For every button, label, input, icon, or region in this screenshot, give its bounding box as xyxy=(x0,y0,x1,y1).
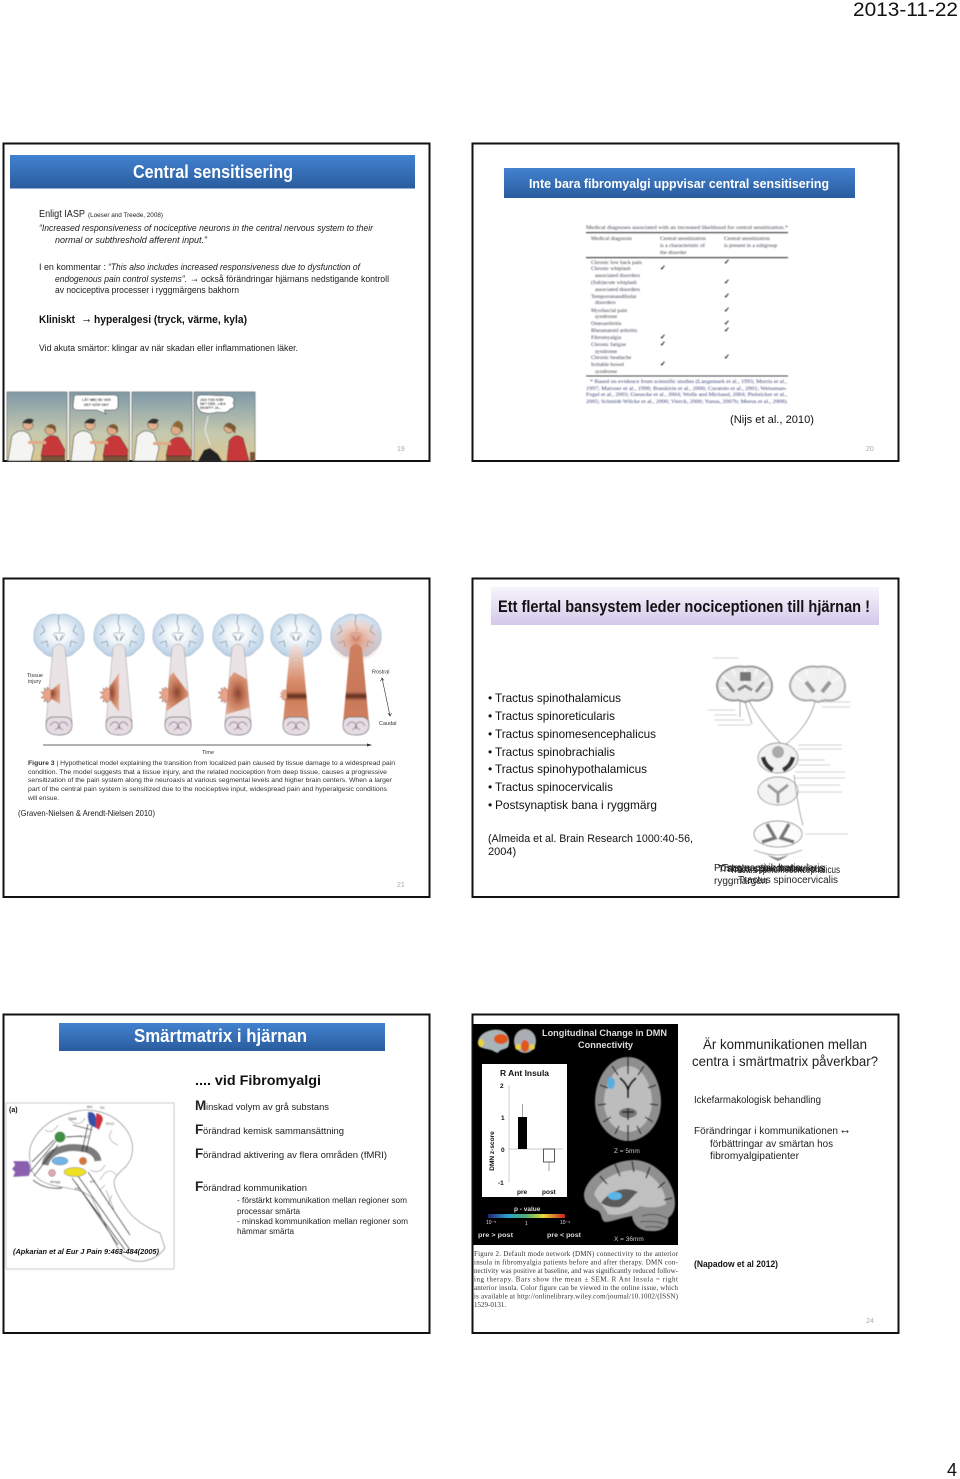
stage 5 xyxy=(271,614,321,735)
citation: Almeida xyxy=(488,833,693,858)
heading bar: Central sensitisering xyxy=(10,155,415,188)
table: medical diagnoses: ✓ xyxy=(660,333,666,341)
panel: slide 19 central sensitisering xyxy=(4,144,430,461)
subheading: vid Fibromyalgi: .... vid Fibromyalgi xyxy=(195,1072,321,1088)
findings list: F xyxy=(195,1179,203,1194)
text: communication changes xyxy=(694,1121,851,1162)
comic panel 2 figures xyxy=(71,395,128,461)
medulla section xyxy=(758,775,803,825)
figure: longitudinal DMN change xyxy=(473,1024,678,1245)
figure caption: insula in fibromyalgia patients before and after therapy. DMN con- xyxy=(474,1258,679,1266)
table: medical diagnoses: ✓ xyxy=(724,353,730,361)
label: tissue injury: Tissue xyxy=(27,673,43,679)
stage 3 xyxy=(153,614,203,735)
text block: commentary: av nociceptiva processer i ryggmärgens bakhorn xyxy=(55,285,239,295)
figure caption: nectivity was positive at baseline, and was significantly reduced follow- xyxy=(474,1267,679,1275)
colour scale: p-value: 10⁻⁵ xyxy=(486,1220,496,1226)
heading bar: Smärtmatrix: Smärtmatrix i hjärnan xyxy=(134,1026,307,1046)
midbrain section xyxy=(758,743,798,773)
comic strip xyxy=(7,392,255,461)
table: medical diagnoses: ✓ xyxy=(724,258,730,266)
text: communication changes: ↔ xyxy=(839,1121,851,1137)
text: communication changes: Förändringar i kommunikationen xyxy=(694,1126,838,1137)
labels: S1 xyxy=(100,1105,106,1110)
heading bar: pathways: Ett flertal bansystem leder nociceptionen till hjärnan ! xyxy=(498,598,870,616)
figure caption: part of the central pain system is sensitized due to the nociceptive input, widespread pain and hyperalgesic conditions xyxy=(28,786,388,793)
citation: Apkarian: (Apkarian et al Eur J Pain 9:463-484(2005) xyxy=(13,1247,159,1256)
table: medical diagnoses: Chronic headache xyxy=(591,355,632,361)
table: medical diagnoses: ✓ xyxy=(724,319,730,327)
findings list: örändrad aktivering av flera områden (fMRI) xyxy=(203,1150,387,1160)
figure caption: 1529-0131. xyxy=(474,1301,506,1309)
figure caption: Figure 3 | Hypothetical model explaining the transition from localized pain caused by tissue damage to a widespread pain xyxy=(28,760,395,767)
figure caption: condition. The model suggests that a tissue injury, and the related nociception from deep tissue, causes a progressive xyxy=(28,769,387,776)
figure caption xyxy=(27,760,395,802)
bar chart: R Ant Insula: pre xyxy=(517,1189,528,1196)
overlapping leftover labels: Tractus spinoreticularis xyxy=(722,863,824,874)
table: medical diagnoses: ✓ xyxy=(724,292,730,300)
heading bar: fibromyalgia: Inte bara fibromyalgi uppvisar central sensitisering xyxy=(529,176,829,191)
table: medical diagnoses: Chronic low back pain xyxy=(591,260,642,266)
table: medical diagnoses: is present in a subgroup xyxy=(724,243,777,249)
comic panel 1 figures xyxy=(8,419,65,461)
overlapping leftover labels xyxy=(714,863,840,887)
table: medical diagnoses: ✓ xyxy=(724,326,730,334)
findings list: örändrad kommunikation xyxy=(203,1183,307,1193)
text block: commentary xyxy=(39,262,389,295)
table: medical diagnoses: associated disorders xyxy=(595,273,640,279)
table: medical diagnoses: Irritable bowel xyxy=(591,362,625,368)
text block: IASP definition: “Increased responsiveness of nociceptive neurons in the central nervous system to their xyxy=(39,223,374,233)
text block: IASP definition: Enligt IASP xyxy=(39,209,85,220)
stage 2 xyxy=(94,614,144,735)
panel: slide 20 central sensitization table xyxy=(472,144,898,461)
findings list: F xyxy=(195,1122,203,1137)
bullet list: tracts: • xyxy=(488,798,492,812)
labels xyxy=(50,1104,115,1191)
bar chart: R Ant Insula: 1 xyxy=(501,1115,505,1122)
table: medical diagnoses: Temporomandibular xyxy=(591,294,637,300)
label: rostral caudal axis xyxy=(372,670,396,727)
table: medical diagnoses: 2005; Schmidt-Wilcke et al., 2006; Vierck, 2006; Yunus, 2007b; Meeus et al., 2008). xyxy=(586,398,789,405)
table: medical diagnoses: syndrome xyxy=(595,369,618,375)
bullet list: tracts: • xyxy=(488,780,492,794)
table: medical diagnoses: Central sensitization xyxy=(660,236,706,242)
comic panel 4 figures: DET DÄR.. LIKA xyxy=(200,402,226,406)
bullet list: tracts: Tractus spinocervicalis xyxy=(495,780,613,794)
table: medical diagnoses: Medical diagnosis xyxy=(591,236,632,242)
right brain section xyxy=(785,666,845,745)
table: medical diagnoses: ✓ xyxy=(660,360,666,368)
citation: Graven-Nielsen: (Graven-Nielsen & Arendt-Nielsen 2010) xyxy=(18,808,155,818)
colour scale: p-value: pre < post xyxy=(547,1232,582,1239)
labels: PCC xyxy=(106,1121,115,1126)
comic panel 4 figures: SKAFFT JA... xyxy=(200,406,222,410)
table: medical diagnoses: * Based on evidence from scientific studies (Langemark et al., 1993; Morris et al., xyxy=(590,378,788,385)
left brain section xyxy=(717,666,782,745)
table: medical diagnoses: Fogel et al., 2003; Giesecke et al., 2004; Wolfe and Michaud, 2004; Pielsticker et al., xyxy=(586,391,788,398)
comic panel 2 figures: LÅT MIG SE VAR xyxy=(82,397,111,402)
figure heading: Connectivity xyxy=(578,1040,633,1050)
citation: Almeida: (Almeida et al. Brain Research 1000:40-56, xyxy=(488,833,693,845)
text: communication changes: förbättringar av smärtan hos xyxy=(710,1139,833,1150)
table: medical diagnoses: the disorder xyxy=(660,250,687,256)
stage 1 xyxy=(34,614,84,735)
axial brain xyxy=(595,1057,661,1141)
stage 6 xyxy=(331,614,381,735)
sagittal brain xyxy=(584,1160,675,1231)
label: tissue injury: injury xyxy=(28,679,41,685)
text: communication changes: fibromyalgipatienter xyxy=(710,1151,800,1162)
figure caption: ing therapy. Bars show the mean ± SEM. R Ant Insula = right xyxy=(474,1276,678,1284)
text block: IASP definition: (Loeser and Treede, 2008) xyxy=(88,212,163,219)
bar chart: R Ant Insula xyxy=(482,1064,567,1197)
table: medical diagnoses: Chronic fatigue xyxy=(591,341,626,348)
heading bar: Smärtmatrix xyxy=(59,1023,385,1051)
table: medical diagnoses: (Sub)acute whiplash xyxy=(591,279,637,286)
table: medical diagnoses: syndrome xyxy=(595,349,618,355)
bullet list: tracts: Tractus spinoreticularis xyxy=(495,709,615,723)
colour scale: p-value xyxy=(478,1206,582,1239)
bar chart: R Ant Insula: post xyxy=(542,1189,557,1196)
bullet list: tracts: Tractus spinomesencephalicus xyxy=(495,727,656,741)
text block: commentary: endogenous pain control systems”. xyxy=(55,274,187,284)
figure caption: sensitization of the pain system along the neuroaxis at various segmental levels and higher brain centers. When a larger xyxy=(28,777,393,784)
panel: slide 22 pathways xyxy=(472,578,898,897)
findings list: örändrad kemisk sammansättning xyxy=(203,1126,344,1136)
icon: PF xyxy=(12,1161,30,1177)
bullet list: tracts xyxy=(488,691,657,812)
stage 4 xyxy=(213,614,263,735)
figure caption: anterior insula. Color figure can be viewed in the online issue, which xyxy=(474,1284,678,1292)
table: medical diagnoses: Chronic whiplash xyxy=(591,266,631,272)
colour scale: p-value: p - value xyxy=(514,1206,541,1213)
labels: SMA xyxy=(68,1116,77,1121)
colour scale: p-value: pre > post xyxy=(478,1232,514,1239)
findings list: F xyxy=(195,1146,203,1161)
table: medical diagnoses: Osteoarthritis xyxy=(591,321,621,327)
labels: M1 xyxy=(87,1104,93,1109)
labels: HT xyxy=(90,1179,96,1184)
text: treatment: Ickefarmakologisk behandling xyxy=(694,1095,821,1106)
comic panel 4 figures: JAG TOG KÄR xyxy=(200,398,224,402)
figure caption xyxy=(474,1250,679,1309)
icon: S2 xyxy=(79,1157,87,1165)
label: rostral caudal axis: Caudal xyxy=(379,721,396,727)
citation: Napadow: (Napadow et al 2012) xyxy=(694,1259,778,1269)
findings list: - minskad kommunikation mellan regioner som xyxy=(237,1217,408,1226)
icon: M1 S1 xyxy=(88,1112,103,1130)
bar chart: R Ant Insula: -1 xyxy=(498,1180,504,1187)
panel: slide 24 DMN connectivity xyxy=(472,1014,898,1333)
spinal section xyxy=(754,821,802,861)
pathways xyxy=(72,1172,130,1250)
text: clinical hyperalgesia: hyperalgesi (tryck, värme, kyla) xyxy=(94,314,247,326)
text block: commentary: “This also includes increased responsiveness due to dysfunction of xyxy=(108,262,361,272)
bullet list: tracts: Postsynaptisk bana i ryggmärg xyxy=(495,798,657,812)
colour scale: p-value: 1 xyxy=(525,1221,528,1227)
brain outline xyxy=(29,1110,165,1261)
labels: PCC xyxy=(81,1134,90,1139)
label: rostral caudal axis: Rostral xyxy=(372,670,389,676)
question heading xyxy=(692,1036,878,1069)
callout lines xyxy=(708,658,850,834)
colour scale: p-value: 10⁻⁵ xyxy=(560,1220,570,1226)
text block: commentary: också förändringar hjärnans nedstigande kontroll xyxy=(201,274,389,284)
figure caption: Figure 2. Default mode network (DMN) connectivity to the anterior xyxy=(474,1250,679,1258)
findings list: processar smärta xyxy=(237,1207,301,1216)
bullet list: tracts: Tractus spinothalamicus xyxy=(495,691,621,705)
icon: thalamus xyxy=(64,1168,86,1176)
arrow: time xyxy=(43,744,372,756)
icon: BG xyxy=(48,1170,56,1176)
panel: slide 21 progression model xyxy=(4,578,430,897)
heading bar: pathways xyxy=(491,587,879,625)
page date: 2013-11-22 xyxy=(853,0,958,21)
comic panel 3 figures xyxy=(134,419,191,461)
diagram: brain and spinal sections xyxy=(708,658,850,861)
page number 19: 19 xyxy=(397,446,405,453)
question heading: centra i smärtmatrix påverkbar? xyxy=(692,1053,878,1069)
text block: IASP definition: normal or subthreshold afferent input.” xyxy=(55,235,208,245)
bullet list: tracts: • xyxy=(488,745,492,759)
figure heading: Longitudinal Change in DMN xyxy=(542,1028,667,1038)
findings list: - förstärkt kommunikation mellan regioner som xyxy=(237,1196,407,1205)
bar chart: R Ant Insula: 2 xyxy=(500,1083,504,1090)
table: medical diagnoses: syndrome xyxy=(595,314,618,320)
heading bar: fibromyalgia xyxy=(504,168,855,198)
bar chart: R Ant Insula: DMN z-score xyxy=(489,1131,496,1171)
text: clinical hyperalgesia: Kliniskt xyxy=(39,314,75,326)
bullet list: tracts: • xyxy=(488,727,492,741)
findings list: inskad volym av grå substans xyxy=(206,1102,330,1112)
page number 24: 24 xyxy=(866,1318,874,1325)
table: medical diagnoses xyxy=(586,224,789,405)
bullet list: tracts: • xyxy=(488,709,492,723)
label: X = 36mm: X = 36mm xyxy=(614,1236,644,1243)
citation: Nijs: (Nijs et al., 2010) xyxy=(730,414,814,426)
findings list: hämmar smärta xyxy=(237,1227,295,1236)
bar chart: R Ant Insula: R Ant Insula xyxy=(500,1069,550,1078)
figure caption: will ensue. xyxy=(27,795,59,802)
citation: Almeida: 2004) xyxy=(488,846,516,858)
bar chart: R Ant Insula: 0 xyxy=(501,1147,505,1154)
findings list xyxy=(195,1098,408,1236)
table: medical diagnoses: ✓ xyxy=(660,340,666,348)
diagram: six stages of spreading sensitization xyxy=(34,614,381,735)
bullet list: tracts: • xyxy=(488,762,492,776)
question heading: Är kommunikationen mellan xyxy=(703,1036,867,1052)
text block: IASP definition xyxy=(39,209,374,245)
bullet list: tracts: Tractus spinohypothalamicus xyxy=(495,762,647,776)
overlapping leftover labels: Tractus spinothalamicus xyxy=(718,864,825,875)
table: medical diagnoses: Fibromyalgia xyxy=(591,335,622,341)
table: medical diagnoses: associated disorders xyxy=(595,287,640,293)
label: tissue injury xyxy=(27,673,43,685)
label: Z = 5mm: Z = 5mm xyxy=(614,1148,640,1155)
text: clinical hyperalgesia: → xyxy=(81,310,92,326)
table: medical diagnoses: is a characteristic of xyxy=(660,242,705,249)
heading bar: Central sensitisering: Central sensitisering xyxy=(133,162,293,182)
table: medical diagnoses: ✓ xyxy=(660,264,666,272)
comic panel 4 figures xyxy=(196,395,255,461)
table: medical diagnoses: Central sensitization xyxy=(724,236,770,242)
overlapping leftover labels: Postsynaptisk bana xyxy=(714,863,801,874)
diagram: pain matrix brain xyxy=(6,1103,174,1269)
text: clinical hyperalgesia xyxy=(39,310,247,326)
icon: ACC xyxy=(54,1132,66,1142)
bullet list: tracts: • xyxy=(488,691,492,705)
figure heading xyxy=(542,1028,667,1050)
text: acute pain: Vid akuta smärtor: klingar av när skadan eller inflammationen läker. xyxy=(39,343,298,353)
figure caption: is available at http://onlinelibrary.wiley.com/journal/10.1002/(ISSN) xyxy=(474,1292,679,1300)
overlapping leftover labels: Tractus spinomesencephalicus xyxy=(730,865,840,876)
overlapping leftover labels: Tractus spinocervicalis xyxy=(738,875,838,886)
corpus callosum arc xyxy=(45,1148,98,1165)
findings list: M xyxy=(195,1098,206,1113)
labels: PB xyxy=(75,1186,81,1191)
table: medical diagnoses: ✓ xyxy=(724,306,730,314)
page number 20: 20 xyxy=(866,446,874,453)
label: (a): (a) xyxy=(9,1107,18,1114)
text block: commentary: → xyxy=(190,271,199,285)
overlapping leftover labels: ryggmärgen xyxy=(714,876,767,887)
bullet list: tracts: Tractus spinobrachialis xyxy=(495,745,615,759)
table: medical diagnoses: Medical diagnoses associated with an increased likelihood for central sensitization.* xyxy=(586,224,788,231)
arrow: time: Time xyxy=(202,750,214,756)
table: medical diagnoses: Rheumatoid arthritis xyxy=(591,328,637,334)
labels: Amyg xyxy=(50,1179,60,1184)
icon: insula xyxy=(52,1157,68,1165)
table: medical diagnoses: disorders xyxy=(595,300,616,306)
table: medical diagnoses: 1997; Maixner et al., 1998; Bueskirin et al., 2000; Curatolo et al., 2001; Weissman- xyxy=(586,386,787,392)
table: medical diagnoses: ✓ xyxy=(724,278,730,286)
comic panel 2 figures: DET GÖR ONT xyxy=(84,402,110,407)
mini brains xyxy=(478,1029,536,1053)
text block: commentary: I en kommentar : xyxy=(39,262,106,272)
panel: slide 23 pain matrix xyxy=(4,1014,430,1333)
page number 21: 21 xyxy=(397,882,405,889)
table: medical diagnoses: Myofascial pain xyxy=(591,307,627,314)
